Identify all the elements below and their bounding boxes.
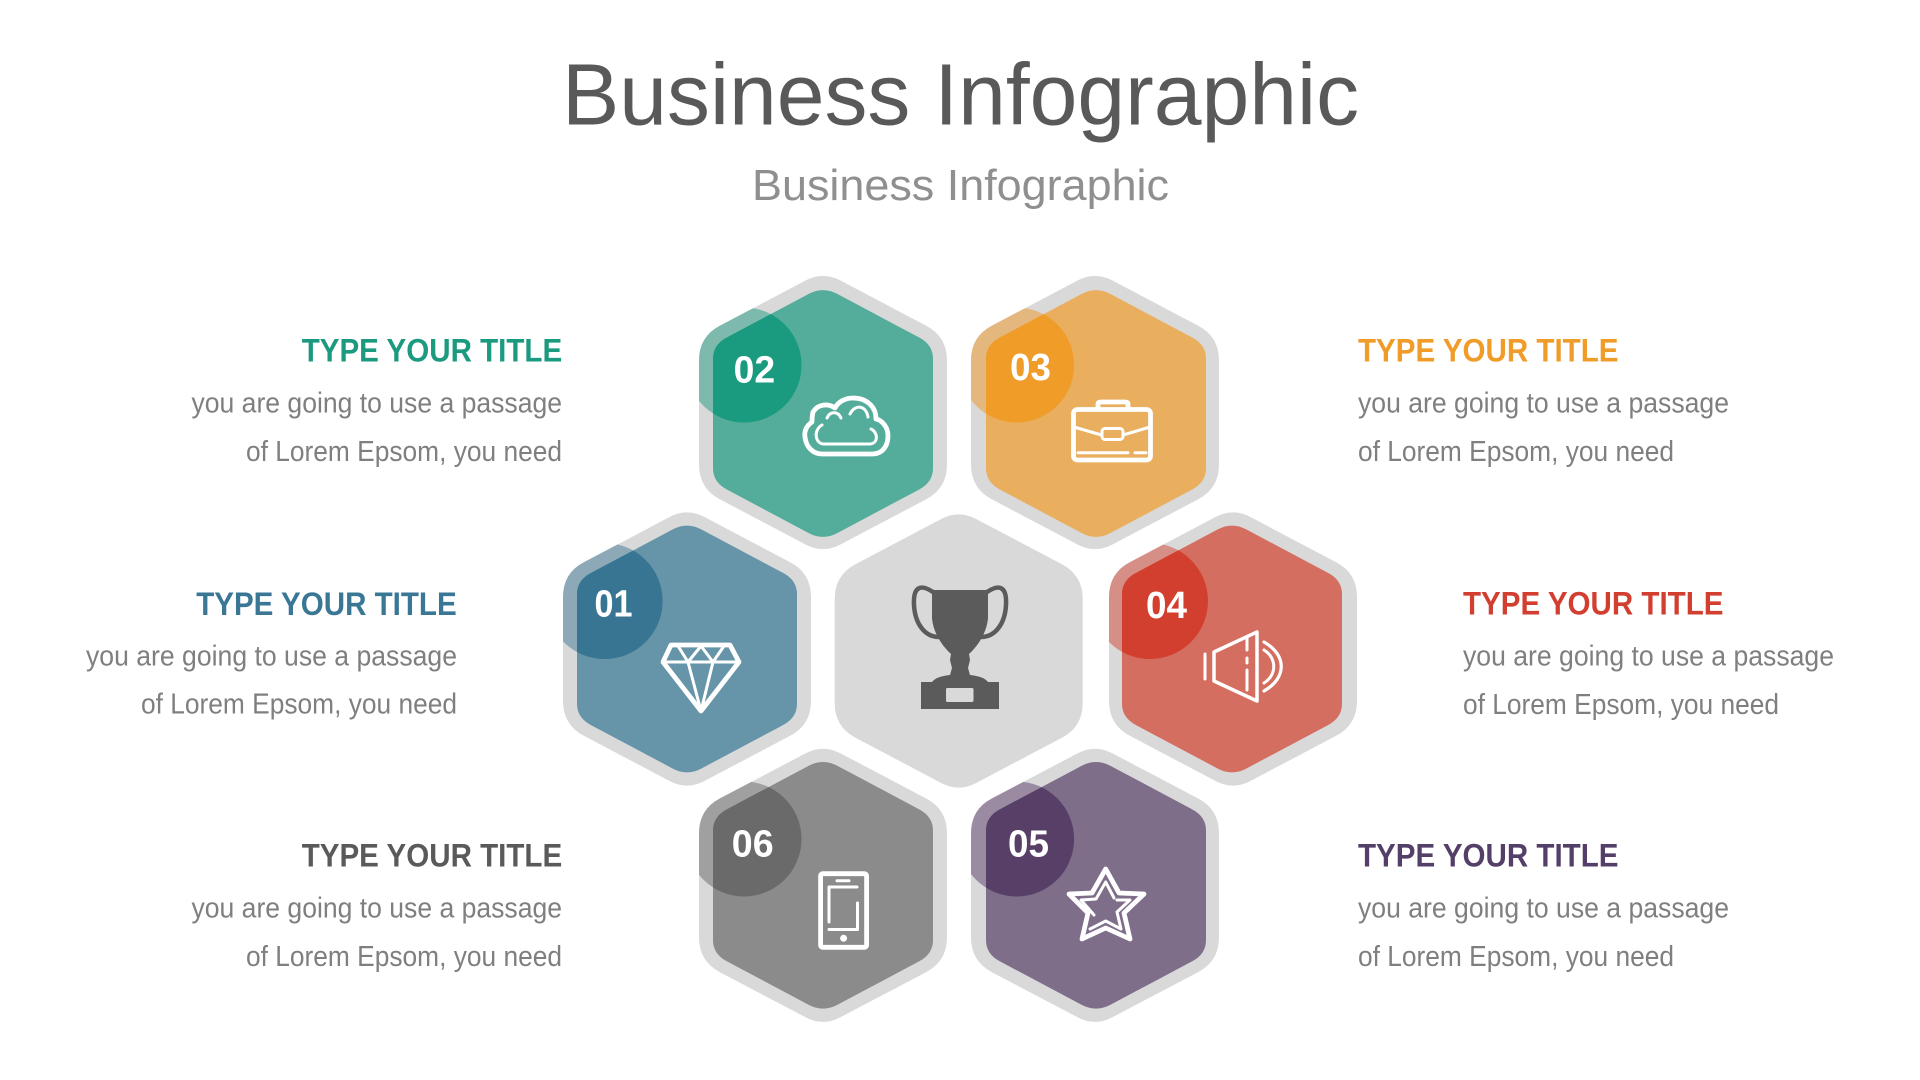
text block: 06: you are going to use a passage [192, 892, 562, 924]
icon: star [1069, 869, 1144, 939]
icon: smartphone [821, 874, 867, 947]
text block: 01 [86, 586, 457, 720]
text block: 02: TYPE YOUR TITLE [302, 333, 562, 369]
text block: 01: of Lorem Epsom, you need [141, 688, 457, 720]
number 01: 01 [594, 584, 632, 626]
hexagon 04 red [1092, 512, 1357, 786]
text block: 04: of Lorem Epsom, you need [1463, 689, 1779, 721]
icon: cloud [805, 398, 888, 454]
text block: 02 [192, 333, 562, 468]
hexagon 05 purple [959, 749, 1219, 1022]
text block: 01: TYPE YOUR TITLE [196, 586, 457, 622]
text block: 05 [1358, 838, 1729, 973]
text block: 03 [1358, 333, 1729, 468]
icon: briefcase [1074, 402, 1150, 460]
text block: 05: TYPE YOUR TITLE [1358, 838, 1618, 874]
number 06: 06 [732, 824, 774, 866]
text block: 06: TYPE YOUR TITLE [302, 838, 562, 874]
title: Business Infographic [562, 46, 1359, 143]
icon: speaker [1205, 632, 1281, 701]
text block: 06: of Lorem Epsom, you need [246, 941, 562, 973]
text block: 04: TYPE YOUR TITLE [1463, 586, 1724, 622]
text block: 05: you are going to use a passage [1358, 892, 1729, 924]
text block: 03: of Lorem Epsom, you need [1358, 436, 1674, 468]
center hexagon gray [835, 514, 1083, 788]
number 03: 03 [1010, 347, 1051, 389]
hexagon 03 orange [959, 276, 1219, 549]
text block: 02: you are going to use a passage [192, 387, 562, 419]
text block: 01: you are going to use a passage [86, 641, 457, 673]
hexagon 01 blue [547, 512, 811, 786]
number 05: 05 [1008, 824, 1049, 866]
hexagon 02 teal [686, 276, 947, 549]
text block: 02: of Lorem Epsom, you need [246, 436, 562, 468]
number 02: 02 [734, 350, 775, 392]
icon: trophy [914, 588, 1006, 709]
hexagon 06 gray [686, 749, 947, 1022]
icon: diamond [663, 645, 739, 711]
text block: 04: you are going to use a passage [1463, 641, 1834, 673]
text block: 06 [192, 838, 562, 973]
text block: 04 [1463, 586, 1834, 721]
text block: 03: you are going to use a passage [1358, 387, 1729, 419]
text block: 03: TYPE YOUR TITLE [1358, 333, 1618, 369]
subtitle: Business Infographic [752, 161, 1169, 210]
number 04: 04 [1146, 585, 1187, 627]
text block: 05: of Lorem Epsom, you need [1358, 941, 1674, 973]
